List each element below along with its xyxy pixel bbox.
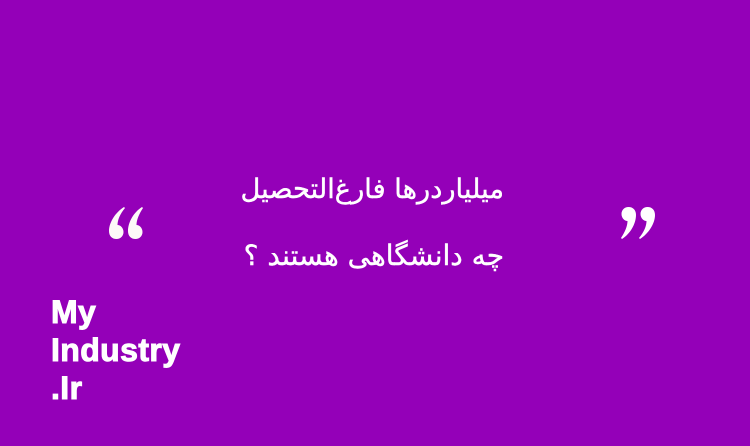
- logo: My Industry .Ir: [51, 294, 181, 406]
- logo line: My: My: [51, 294, 96, 330]
- icon: closing quotation mark: [621, 207, 655, 239]
- question text: first line: میلیاردرها فارغ‌التحصیل: [240, 174, 504, 205]
- logo line: .Ir: .Ir: [51, 370, 82, 406]
- logo line: Industry: Industry: [51, 332, 180, 368]
- question text: second line: چه دانشگاهی هستند ؟: [244, 239, 504, 272]
- icon: opening quotation mark: [109, 207, 143, 239]
